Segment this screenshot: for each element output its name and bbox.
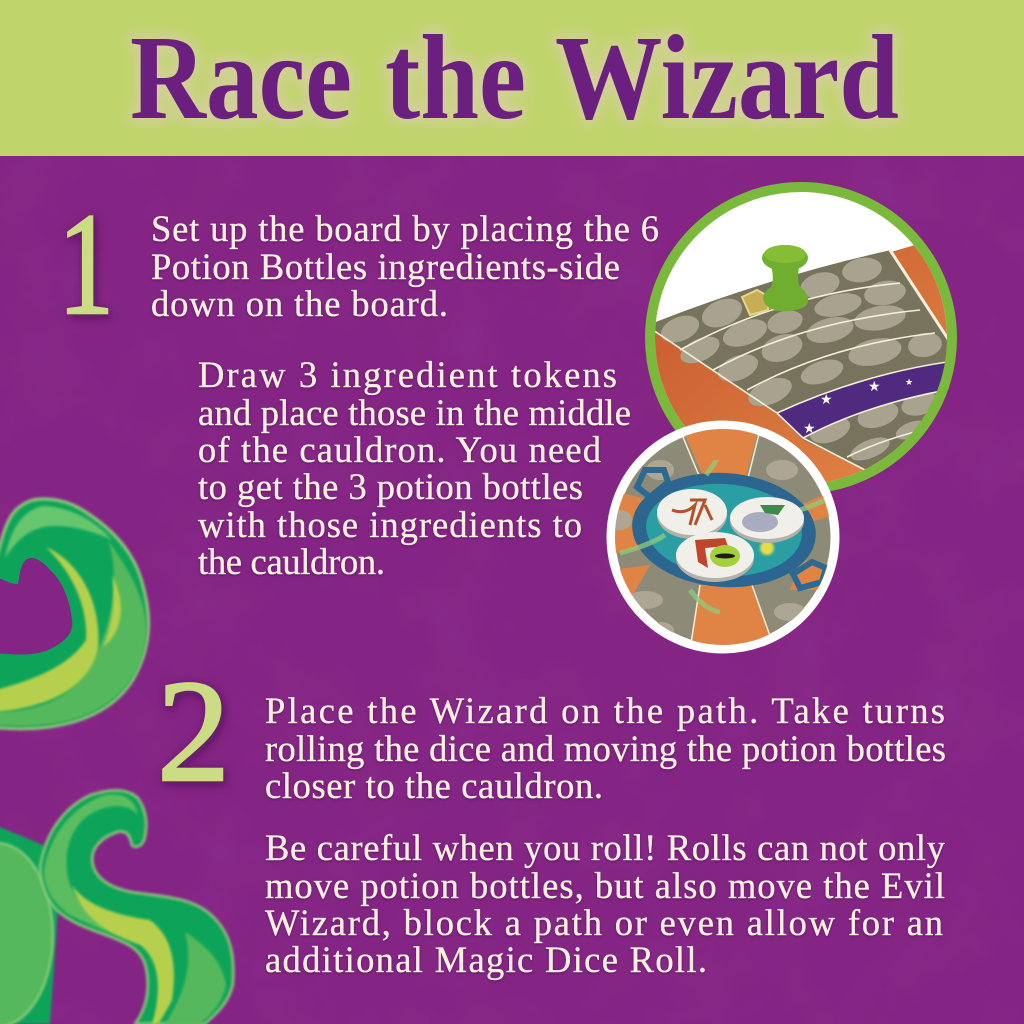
title banner (0, 0, 1024, 156)
token: branch (657, 489, 727, 539)
step 2 warning text: move potion bottles, but also move the Evil (265, 865, 945, 906)
step 1 tokens text: of the cauldron. You need (198, 429, 601, 470)
green smoke swirl: upper left (0, 499, 149, 729)
smoke lower right lobe (165, 932, 226, 1024)
title banner: Race (130, 11, 352, 145)
smoke S curl (40, 790, 234, 1024)
step 2 warning text: Wizard, block a path or even allow for an (265, 902, 943, 943)
cauldron handles (637, 470, 826, 588)
cobblestone path (653, 250, 950, 470)
smoke light bands (44, 794, 150, 937)
smoke right yellow streak (103, 575, 121, 647)
title: Wizard (555, 11, 899, 145)
board lines (653, 250, 950, 470)
token: eye (676, 532, 754, 582)
step 1 tokens text: and place those in the middle (198, 392, 631, 433)
title banner: Wizard (555, 11, 899, 145)
token: creature (730, 497, 804, 543)
space marker (742, 290, 768, 315)
photo: cauldron with ingredient tokens (608, 425, 835, 650)
title: Race (130, 11, 352, 145)
orange wedges (610, 425, 835, 650)
band stars: ★ (803, 421, 816, 437)
photo: game board with green pawn (640, 187, 960, 500)
smoke light lobe (0, 540, 146, 726)
green wisps (620, 460, 825, 612)
step 1 tokens text: with those ingredients to (198, 504, 582, 545)
step 2 warning text: Be careful when you roll! Rolls can not only (265, 827, 946, 868)
step 2 path text: closer to the cauldron. (265, 765, 603, 806)
step number 2: 2 (157, 650, 230, 812)
step 2 warning text: additional Magic Dice Roll. (265, 939, 707, 980)
stone details (608, 460, 806, 638)
step 2 warning text (265, 827, 946, 980)
step number 1: 1 (58, 183, 114, 345)
smoke highlight (5, 506, 112, 558)
step 1 setup text (151, 208, 659, 324)
starry band (777, 362, 947, 438)
step 1 tokens text: to get the 3 potion bottles (198, 466, 583, 507)
smoke yellow streak (0, 547, 99, 712)
step 1 setup text: Potion Bottles ingredients-side (151, 246, 620, 287)
smoke blob (0, 825, 60, 1024)
title banner: the (385, 11, 526, 145)
smoke yellow band (72, 885, 174, 1024)
step 1 setup text: Set up the board by placing the 6 (151, 208, 659, 249)
band stars: ★ (820, 392, 833, 408)
step 1 setup text: down on the board. (151, 283, 448, 324)
radial lines (682, 435, 770, 640)
step 2 path text: Place the Wizard on the path. Take turns (265, 690, 945, 731)
step 1 tokens text (198, 354, 631, 582)
band stars (803, 378, 913, 437)
step 1 tokens text: the cauldron. (198, 541, 385, 582)
step 2 path text: rolling the dice and moving the potion bottles (265, 728, 946, 769)
title: the (385, 11, 526, 145)
cobblestones (657, 255, 944, 465)
green smoke swirl: lower left (0, 790, 234, 1024)
band stars: ★ (905, 378, 913, 388)
orange board area (655, 245, 947, 482)
green pawn (762, 245, 808, 311)
step 2 path text (265, 690, 946, 806)
band stars: ★ (868, 379, 881, 395)
title (130, 11, 899, 145)
smoke inner cutout (0, 558, 72, 655)
cauldron body (632, 472, 816, 588)
step 1 tokens text: Draw 3 ingredient tokens (198, 354, 617, 395)
